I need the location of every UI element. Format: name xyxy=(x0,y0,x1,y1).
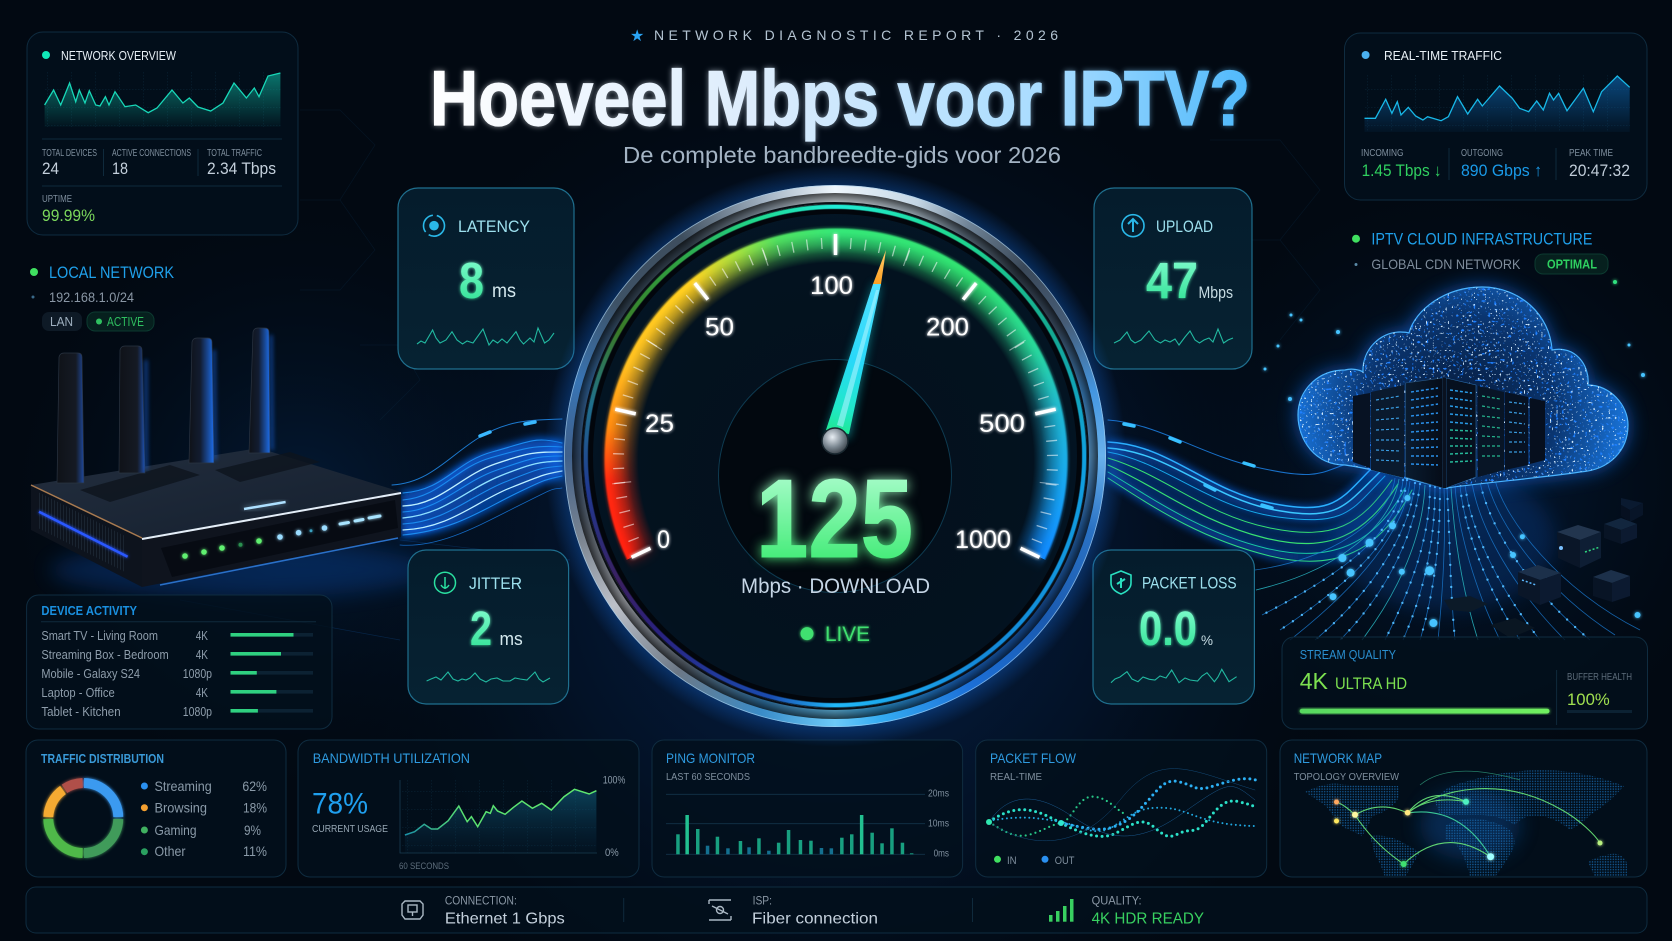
panel: latency: ms xyxy=(492,281,516,302)
status bar: Ethernet 1 Gbps xyxy=(445,910,565,927)
cube xyxy=(1518,565,1561,605)
row: Tablet xyxy=(41,705,313,719)
panel: real-time traffic xyxy=(1344,33,1647,200)
panel: network overview: NETWORK OVERVIEW xyxy=(61,48,177,63)
icon: jitter xyxy=(434,572,456,593)
row: Tablet: 1080p xyxy=(183,705,212,719)
panel: stream quality: 100% xyxy=(1567,690,1610,709)
label: local network: ACTIVE xyxy=(107,314,144,329)
panel: ping monitor: PING MONITOR xyxy=(666,750,755,766)
panel: real-time traffic: 1.45 Tbps ↓ xyxy=(1362,161,1442,180)
panel: real-time traffic: 890 Gbps ↑ xyxy=(1461,161,1542,180)
unit label: Mbps · DOWNLOAD xyxy=(741,575,930,598)
wave chart xyxy=(986,769,1256,841)
scale labels: 50 xyxy=(705,314,734,342)
panel: network overview: 99.99% xyxy=(42,206,95,225)
status bar: CONNECTION: xyxy=(445,895,517,907)
antennas xyxy=(57,328,272,483)
row: Laptop: Laptop - Office xyxy=(41,686,115,700)
legend: Gaming xyxy=(154,822,196,838)
legend: 18% xyxy=(243,800,267,816)
legend: 62% xyxy=(242,778,267,794)
router xyxy=(31,328,430,598)
fan-out fibers under cloud xyxy=(1255,280,1645,640)
area chart xyxy=(1364,75,1630,132)
panel: bandwidth utilization: 0% xyxy=(605,847,619,859)
row: Streaming box xyxy=(41,648,313,662)
big reading: 125 xyxy=(756,457,913,581)
line chart xyxy=(400,780,597,853)
label: IPTV cloud infrastructure xyxy=(1352,230,1608,274)
row: Laptop: 4K xyxy=(196,686,209,700)
panel: device activity xyxy=(27,595,332,729)
panel: stream quality: ULTRA HD xyxy=(1335,674,1407,693)
cloud xyxy=(1295,285,1631,490)
panel: network overview: 2.34 Tbps xyxy=(207,159,276,178)
panel: real-time traffic: PEAK TIME xyxy=(1569,148,1613,159)
legend: IN xyxy=(1007,855,1017,867)
panel: stream quality: STREAM QUALITY xyxy=(1300,647,1396,662)
row: Laptop xyxy=(41,686,313,700)
legend: Streaming xyxy=(154,778,212,794)
panel: ping monitor: 10ms xyxy=(928,818,949,830)
gauge: metal bezel and dial xyxy=(548,168,1122,744)
label: IPTV cloud infrastructure: IPTV CLOUD INFRASTRUCTURE xyxy=(1371,230,1592,248)
scale labels: 25 xyxy=(645,410,674,438)
icon: shield xyxy=(1111,571,1131,594)
icon: fiber xyxy=(709,900,731,920)
status bar xyxy=(26,887,1647,933)
panel: packet loss xyxy=(1093,550,1254,704)
panel: real-time traffic: INCOMING xyxy=(1361,148,1404,159)
panel: stream quality: 4K xyxy=(1300,668,1329,694)
panel: upload: 47 xyxy=(1146,252,1198,309)
needle xyxy=(822,250,886,454)
panel: network map: NETWORK MAP xyxy=(1294,750,1382,766)
donut chart xyxy=(48,783,118,853)
row: Streaming box: 4K xyxy=(196,648,209,662)
label: local network: 192.168.1.0/24 xyxy=(49,290,134,305)
panel: stream quality xyxy=(1282,637,1648,729)
panel: jitter: 2 xyxy=(470,603,492,656)
panel: bandwidth utilization: 60 SECONDS xyxy=(399,861,449,872)
panel: jitter xyxy=(408,550,569,704)
panel: bandwidth utilization: CURRENT USAGE xyxy=(312,823,388,835)
panel: packet flow: REAL-TIME xyxy=(990,772,1042,783)
scale ticks xyxy=(615,234,1056,557)
scale labels: 500 xyxy=(979,410,1025,438)
panel: upload: UPLOAD xyxy=(1156,217,1213,236)
panel: network overview: UPTIME xyxy=(42,194,72,205)
panel: network overview xyxy=(27,32,298,235)
data cubes xyxy=(1444,498,1643,638)
panel: bandwidth utilization: BANDWIDTH UTILIZATION xyxy=(313,750,470,766)
row: Mobile: Mobile - Galaxy S24 xyxy=(41,667,140,681)
panel: bandwidth utilization: 100% xyxy=(603,774,626,786)
panel: latency: 8 xyxy=(459,252,484,309)
needle hub xyxy=(822,428,848,454)
cube xyxy=(1604,518,1637,544)
status bar: Fiber connection xyxy=(752,910,878,927)
legend: 11% xyxy=(243,843,267,859)
legend xyxy=(141,778,267,859)
panel: jitter: JITTER xyxy=(469,574,522,593)
panel: jitter: ms xyxy=(500,629,523,649)
area chart xyxy=(45,72,281,127)
cube xyxy=(1557,525,1601,568)
world map xyxy=(1305,770,1627,877)
live indicator: LIVE xyxy=(825,623,870,646)
panel: network map xyxy=(1280,740,1647,877)
legend: Browsing xyxy=(154,800,207,816)
cube xyxy=(1621,498,1643,522)
panel: latency xyxy=(398,188,574,369)
panel: network overview: 18 xyxy=(112,159,128,178)
panel: packet loss: PACKET LOSS xyxy=(1142,574,1237,593)
panel: traffic distribution: TRAFFIC DISTRIBUTION xyxy=(41,752,164,766)
row: Smart TV: 4K xyxy=(196,629,209,643)
row: Streaming box: Streaming Box - Bedroom xyxy=(41,648,169,662)
panel: network overview: 24 xyxy=(42,159,59,178)
panel: real-time traffic: 20:47:32 xyxy=(1569,161,1630,180)
legend: 9% xyxy=(244,822,261,838)
icon: upload xyxy=(1122,215,1144,237)
icon: connection xyxy=(402,901,423,919)
icon: signal bars xyxy=(1049,899,1074,922)
bar chart xyxy=(676,815,913,854)
status bar: 4K HDR READY xyxy=(1092,910,1204,927)
panel: packet loss: % xyxy=(1201,632,1213,648)
row: Smart TV: Smart TV - Living Room xyxy=(41,629,158,643)
panel: ping monitor: 20ms xyxy=(928,788,949,800)
panel: upload: Mbps xyxy=(1198,283,1233,302)
scale labels: 0 xyxy=(657,526,670,554)
panel: network map: TOPOLOGY OVERVIEW xyxy=(1294,772,1400,783)
panel: traffic distribution xyxy=(26,740,286,877)
legend xyxy=(994,855,1075,867)
panel: real-time traffic: OUTGOING xyxy=(1461,148,1503,159)
scale labels: 200 xyxy=(926,314,969,342)
cube xyxy=(1593,570,1630,602)
title: Hoeveel Mbps voor IPTV? xyxy=(430,54,1250,142)
nodes xyxy=(1334,799,1602,867)
panel: packet flow: PACKET FLOW xyxy=(990,750,1077,766)
icon: star: ★ xyxy=(630,28,644,45)
panel: bandwidth utilization: 78% xyxy=(312,788,368,820)
panel: packet flow xyxy=(976,740,1267,877)
panel: packet loss: 0.0 xyxy=(1139,603,1197,656)
fiber bundle: gauge to cloud xyxy=(1108,420,1412,561)
scale labels xyxy=(645,272,1025,554)
scale labels: 1000 xyxy=(955,526,1011,554)
row: Smart TV xyxy=(41,629,313,643)
label: local network xyxy=(30,263,175,331)
label: IPTV cloud infrastructure: GLOBAL CDN NETWORK xyxy=(1371,256,1521,272)
panel: real-time traffic: REAL-TIME TRAFFIC xyxy=(1384,48,1502,63)
row: Mobile: 1080p xyxy=(183,667,212,681)
panel: network overview: TOTAL TRAFFIC xyxy=(207,148,262,159)
legend: Other xyxy=(154,843,186,859)
panel: ping monitor: 0ms xyxy=(934,848,949,860)
status LEDs xyxy=(182,516,380,559)
live indicator xyxy=(800,623,870,646)
panel: latency: LATENCY xyxy=(458,217,530,236)
panel: network overview: ACTIVE CONNECTIONS xyxy=(112,148,191,159)
server racks xyxy=(1353,378,1545,488)
panel: network overview: TOTAL DEVICES xyxy=(42,148,97,159)
panel: ping monitor: LAST 60 SECONDS xyxy=(666,772,750,783)
panel: device activity: DEVICE ACTIVITY xyxy=(41,603,137,618)
kicker line: NETWORK DIAGNOSTIC REPORT · 2026 xyxy=(654,27,1058,43)
icon: latency xyxy=(424,215,444,236)
connection arcs xyxy=(1336,771,1600,864)
subtitle: De complete bandbreedte-gids voor 2026 xyxy=(623,142,1061,168)
label: IPTV cloud infrastructure: OPTIMAL xyxy=(1547,256,1597,271)
row: Tablet: Tablet - Kitchen xyxy=(41,705,121,719)
status bar: ISP: xyxy=(753,895,772,907)
panel: stream quality: BUFFER HEALTH xyxy=(1567,672,1632,683)
label: local network: LOCAL NETWORK xyxy=(49,263,175,282)
panel: ping monitor xyxy=(652,740,963,877)
fiber bundle: router to gauge xyxy=(392,419,562,545)
label: local network: LAN xyxy=(50,314,73,329)
gauge: ticks and readings xyxy=(564,186,1106,726)
panel: bandwidth utilization xyxy=(298,740,639,877)
legend: OUT xyxy=(1055,855,1075,867)
panel: upload xyxy=(1094,188,1252,369)
row: Mobile xyxy=(41,667,313,681)
status bar: QUALITY: xyxy=(1092,895,1142,907)
scale labels: 100 xyxy=(810,272,853,300)
